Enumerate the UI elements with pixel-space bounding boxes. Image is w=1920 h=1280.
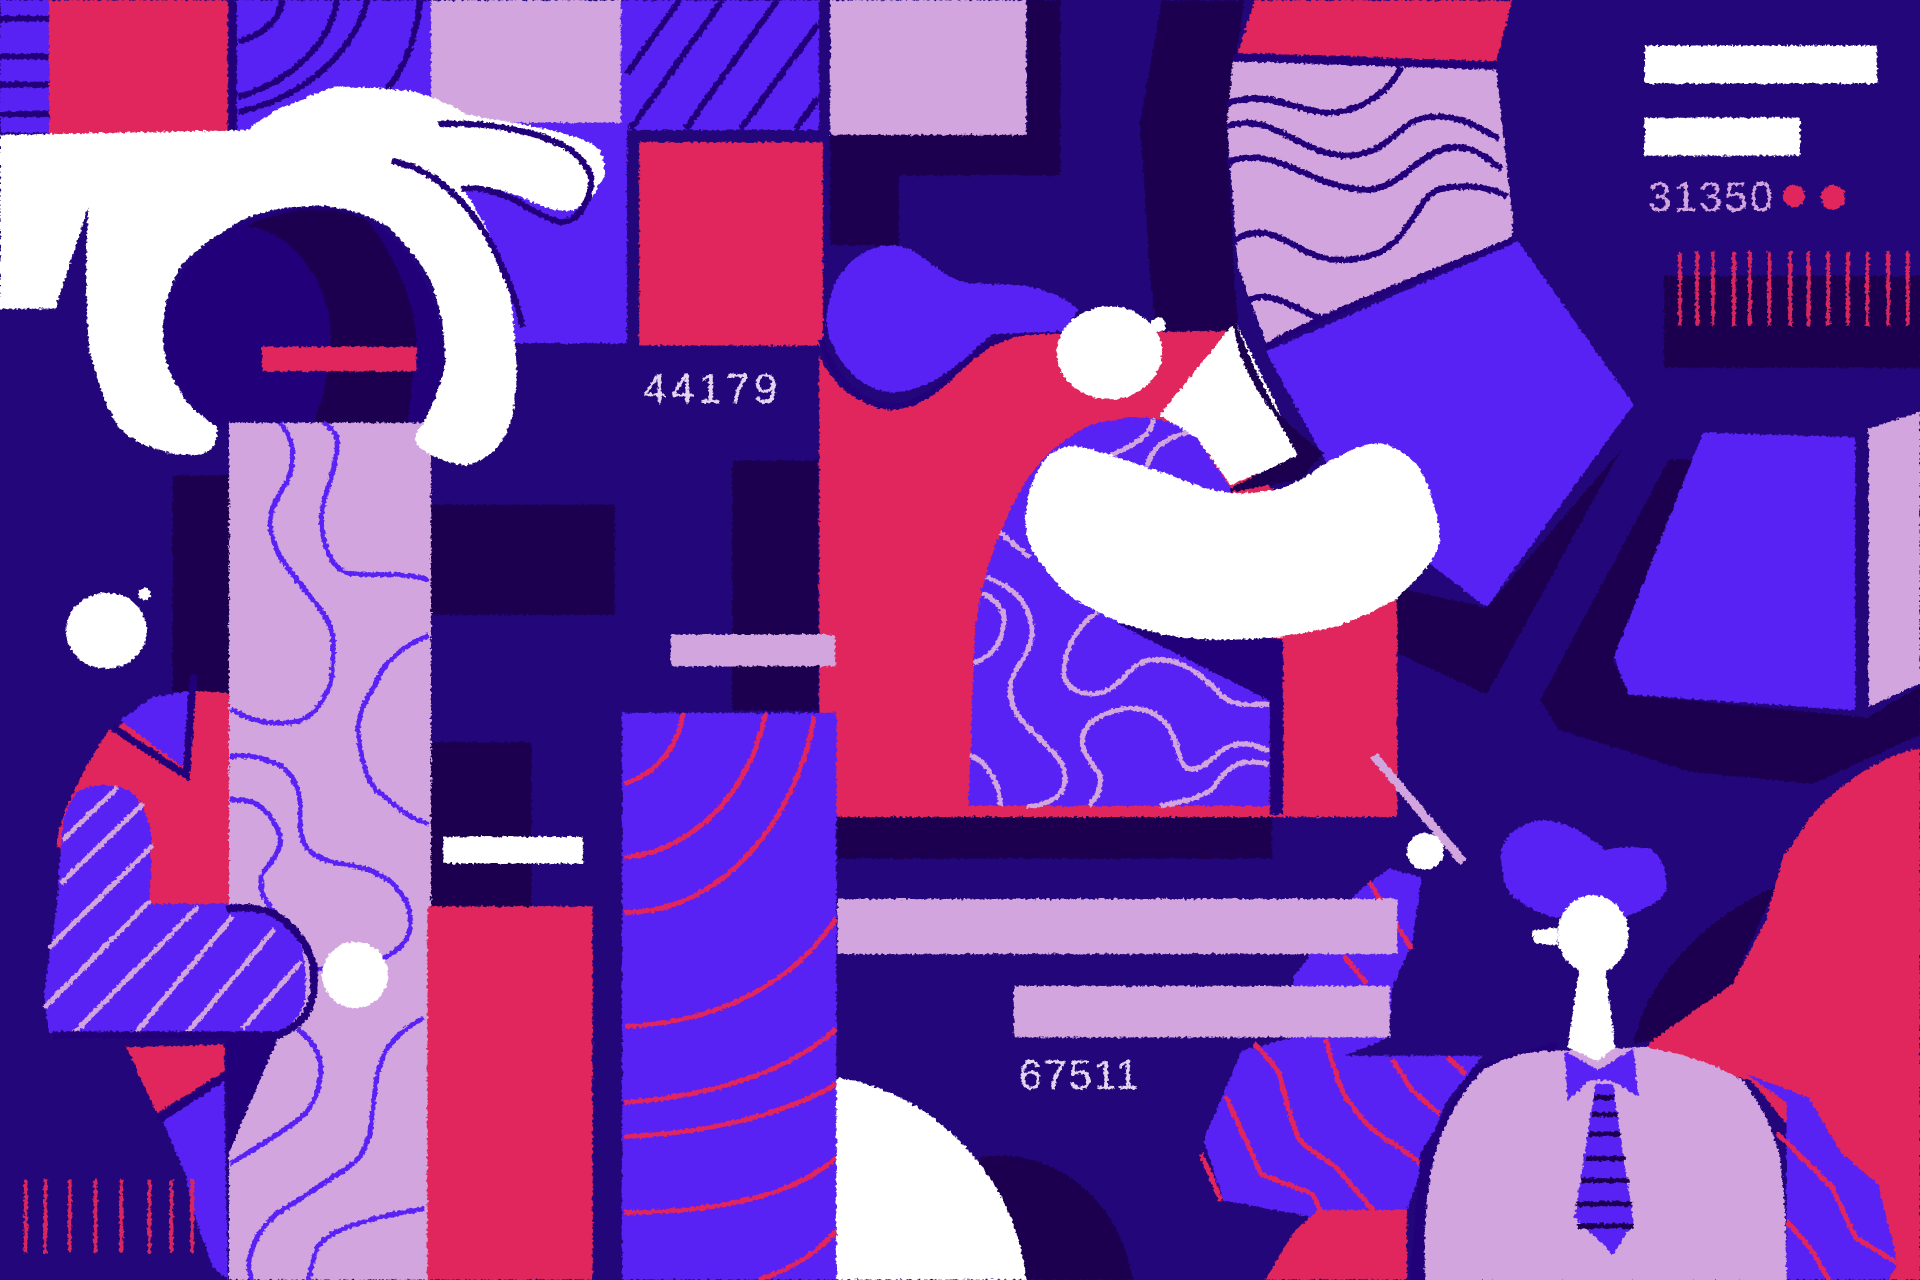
panel: lilac block right — [830, 0, 1026, 135]
tick marks top right — [1680, 251, 1908, 326]
red bar — [262, 347, 416, 371]
panel: lilac bars — [838, 899, 1397, 1037]
panel: right purple — [1614, 432, 1855, 710]
panel: central red — [819, 331, 1397, 817]
person — [1409, 895, 1898, 1280]
white megaphone shape — [1160, 321, 1300, 485]
panel: purple column with red arcs — [622, 713, 836, 1280]
right red blob — [1641, 748, 1920, 1280]
hole crescent shadow — [245, 210, 416, 423]
panel: top red block — [49, 0, 228, 137]
white hand — [0, 87, 605, 466]
panel: purple behind hand — [459, 123, 627, 343]
panel: lilac bar mid — [671, 634, 835, 666]
hand finger lines — [392, 124, 591, 327]
white ball — [322, 942, 388, 1008]
figure left — [44, 675, 314, 1280]
dark edge of megaphone — [1231, 319, 1321, 490]
purple hair — [1501, 820, 1667, 917]
pointer stick — [1374, 756, 1463, 862]
white dome bottom — [836, 1078, 1026, 1280]
white ball top — [1057, 306, 1166, 399]
panel: wavy lilac — [1227, 58, 1512, 347]
panel: top left stripes — [0, 0, 51, 132]
panel: arch with squiggles — [969, 418, 1283, 814]
panel: rotated purple square — [1266, 241, 1633, 608]
tick marks bottom left — [26, 1179, 192, 1253]
white arm — [1025, 443, 1440, 640]
panel: top red band — [1238, 0, 1512, 61]
number 31350: 31350 — [1648, 173, 1773, 220]
red dots — [1783, 185, 1845, 210]
number 67511: 67511 — [1019, 1051, 1139, 1098]
panel: red column — [427, 906, 593, 1280]
small white blob left — [66, 588, 151, 669]
panel: right lilac — [1869, 412, 1920, 707]
panel: hatched purple block — [621, 0, 819, 130]
hole in hand — [163, 206, 444, 429]
number 44179: 44179 — [643, 365, 778, 413]
cloud outline — [822, 337, 1008, 407]
purple sleeve with stripes — [1201, 868, 1483, 1217]
white bar — [443, 837, 583, 863]
blob: purple cloud — [827, 245, 1079, 392]
panel: purple arcs block — [233, 0, 433, 132]
panel: lilac block — [431, 0, 622, 130]
white bars top right — [1644, 46, 1877, 156]
panel: red square — [639, 142, 823, 346]
red blob bottom — [1265, 1210, 1407, 1280]
red right pillar — [1283, 625, 1397, 817]
white ball pointer — [1407, 833, 1444, 870]
panel: lilac squiggle column — [229, 423, 431, 1280]
